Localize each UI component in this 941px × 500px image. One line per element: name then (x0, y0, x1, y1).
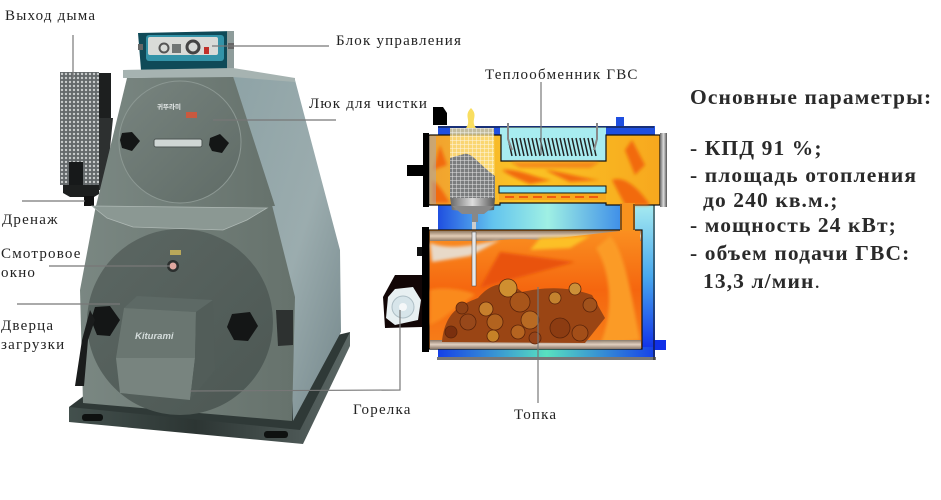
firewood (442, 279, 605, 344)
labels: Теплообменник ГВС (485, 67, 639, 83)
parameters text: - площадь отопления (690, 163, 917, 187)
burner cover: Kiturami (135, 331, 174, 342)
labels (1, 8, 639, 423)
lower door (75, 229, 293, 415)
knob (91, 306, 120, 336)
labels: загрузки (1, 337, 65, 353)
labels: окно (1, 265, 36, 281)
flue cylinder (450, 108, 495, 234)
water jacket (437, 117, 666, 360)
black door plates (407, 107, 447, 352)
parameters text: - объем подачи ГВС: (690, 241, 910, 265)
top plate (123, 68, 295, 82)
leader lines (17, 35, 541, 403)
parameters text: - КПД 91 %; (690, 136, 823, 160)
labels: Люк для чистки (309, 96, 428, 112)
parameters text: - мощность 24 кВт; (690, 213, 897, 237)
sight glass (167, 250, 181, 272)
burner (383, 275, 422, 328)
firebox (429, 203, 642, 349)
parameters text: Основные параметры: (690, 85, 932, 109)
labels: Дверца (1, 318, 54, 334)
hot water coil (508, 123, 597, 156)
knob (227, 312, 258, 341)
ash shelf (92, 206, 267, 230)
upper cleaning hatch (119, 81, 241, 203)
labels: Блок управления (336, 33, 462, 49)
side panel (233, 76, 341, 421)
parameters text: до 240 кв.м.; (703, 188, 838, 212)
labels: Дренаж (2, 212, 59, 228)
upper body front (96, 76, 275, 206)
cutaway diagram (383, 107, 667, 360)
labels: Смотровое (1, 246, 82, 262)
knob (209, 134, 229, 153)
knob (120, 132, 140, 151)
parameters text (690, 85, 932, 293)
control unit (138, 31, 234, 70)
burner cover (116, 296, 215, 400)
lower body front (80, 205, 295, 421)
upper cleaning hatch: 귀뚜라미 (157, 102, 181, 111)
small water plate (499, 186, 606, 200)
chimney (60, 72, 113, 206)
upper gas chamber (429, 133, 667, 207)
labels: Выход дыма (5, 8, 96, 24)
labels: Топка (514, 407, 557, 423)
labels: Горелка (353, 402, 412, 418)
base plate (69, 332, 350, 444)
boiler photo (60, 31, 350, 444)
parameters text: 13,3 л/мин. (703, 269, 821, 293)
